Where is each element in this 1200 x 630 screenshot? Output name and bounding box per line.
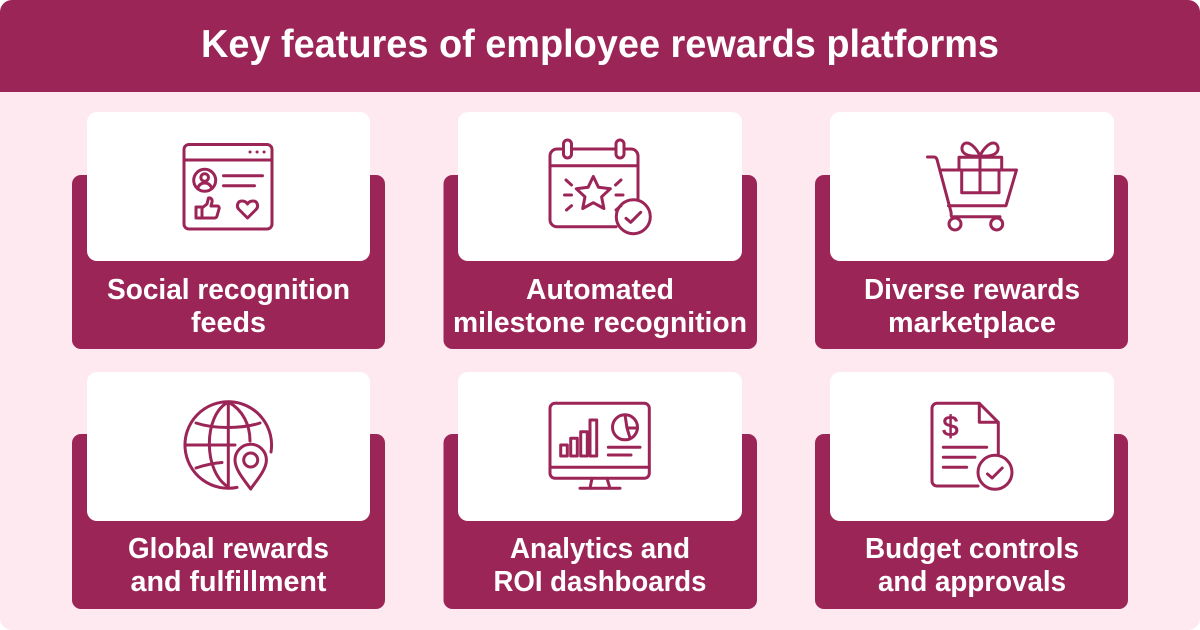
label [128, 533, 329, 598]
label: milestone recognition [453, 307, 747, 339]
panel: analytics and ROI dashboards [444, 372, 757, 609]
label [864, 274, 1080, 339]
label [865, 533, 1079, 598]
header band [0, 0, 1200, 92]
icon: budget document with check [932, 403, 1012, 489]
label: and approvals [878, 566, 1066, 598]
icon: social feed window [184, 144, 272, 229]
label: marketplace [888, 307, 1056, 339]
icon: calendar with star [550, 140, 650, 234]
label [494, 533, 706, 598]
label: Social recognition [107, 274, 350, 306]
label: Analytics and [510, 533, 690, 565]
label: ROI dashboards [494, 566, 706, 598]
label: feeds [191, 307, 266, 339]
label: Diverse rewards [864, 274, 1080, 306]
icon: shopping cart with gift [928, 143, 1016, 230]
panel: global rewards and fulfillment [72, 372, 385, 609]
label [107, 274, 350, 339]
icon: monitor with charts [550, 403, 649, 488]
icon: budget document with check: $ [942, 411, 959, 443]
panel: automated milestone recognition [444, 112, 757, 349]
panel: social recognition feeds [72, 112, 385, 349]
title: Key features of employee rewards platforms [201, 23, 999, 66]
label: Automated [526, 274, 674, 306]
label: Global rewards [128, 533, 329, 565]
label: and fulfillment [130, 566, 327, 598]
panel: budget controls and approvals [815, 372, 1128, 609]
panel: diverse rewards marketplace [815, 112, 1128, 349]
label [453, 274, 747, 339]
label: Budget controls [865, 533, 1079, 565]
icon: globe with location pin [185, 402, 272, 489]
